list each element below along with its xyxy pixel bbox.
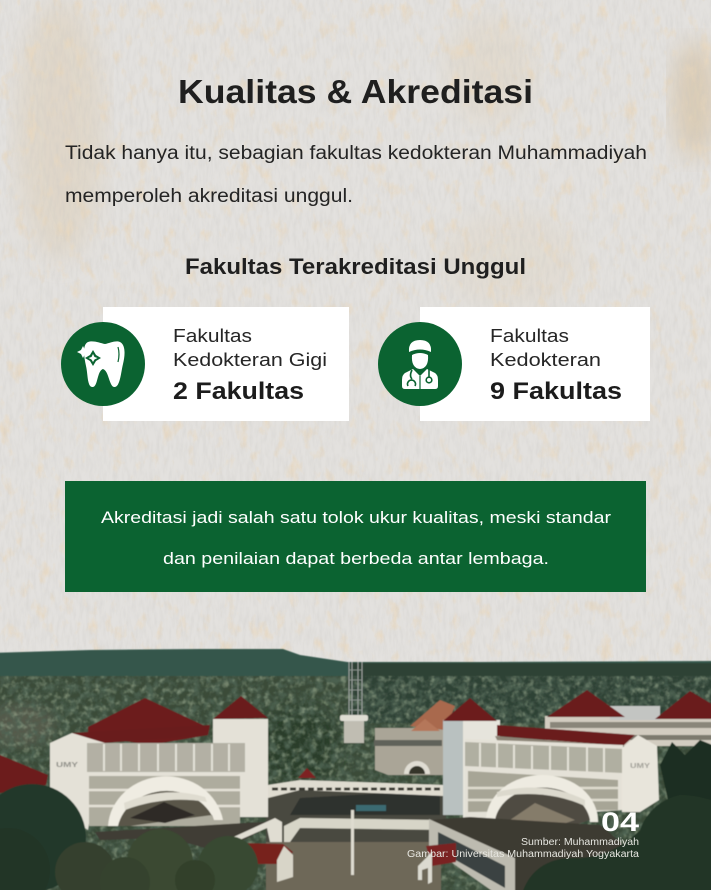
icon: tooth <box>61 322 145 406</box>
intro paragraph: memperoleh akreditasi unggul. <box>65 186 353 207</box>
title: Kualitas & Akreditasi <box>178 73 533 110</box>
card: Fakultas Kedokteran Gigi <box>61 307 349 421</box>
callout: dan penilaian dapat berbeda antar lembaga. <box>163 549 549 568</box>
middle building with orange roof <box>374 700 455 775</box>
source credits <box>407 837 639 860</box>
left building lower roof <box>95 818 293 882</box>
intro paragraph <box>65 143 647 207</box>
callout: Akreditasi jadi salah satu tolok ukur kualitas, meski standar <box>101 508 611 527</box>
section heading: Fakultas Terakreditasi Unggul <box>185 254 526 279</box>
hill on the horizon <box>0 649 711 700</box>
card text: Fakultas <box>173 325 252 346</box>
card text: 9 Fakultas <box>490 378 622 405</box>
right university building: UMY <box>630 763 650 770</box>
card text: Kedokteran <box>490 349 601 370</box>
source credits: Sumber: Muhammadiyah <box>521 837 639 848</box>
card text: 2 Fakultas <box>173 378 304 405</box>
card text <box>173 325 327 405</box>
right building lower roof <box>418 817 640 890</box>
source credits: Gambar: Universitas Muhammadiyah Yogyakarta <box>407 849 639 860</box>
icon: doctor <box>378 322 462 406</box>
left university building: UMY <box>56 760 78 769</box>
buildings at back right <box>545 690 711 746</box>
card text <box>490 325 622 405</box>
forest background <box>0 676 711 890</box>
photo: campus aerial view <box>0 649 711 890</box>
intro paragraph: Tidak hanya itu, sebagian fakultas kedokteran Muhammadiyah <box>65 143 647 164</box>
central plaza <box>266 768 446 890</box>
right university building <box>443 698 659 825</box>
card text: Kedokteran Gigi <box>173 349 327 370</box>
callout <box>65 481 646 592</box>
antenna and water tower <box>340 662 368 743</box>
card: Fakultas Kedokteran <box>378 307 650 421</box>
trees on the left <box>0 784 258 890</box>
card text: Fakultas <box>490 325 569 346</box>
trees and palms on the right <box>520 740 711 890</box>
left red roof house <box>0 751 48 795</box>
page number: 04 <box>601 807 639 837</box>
left university building <box>50 696 268 830</box>
